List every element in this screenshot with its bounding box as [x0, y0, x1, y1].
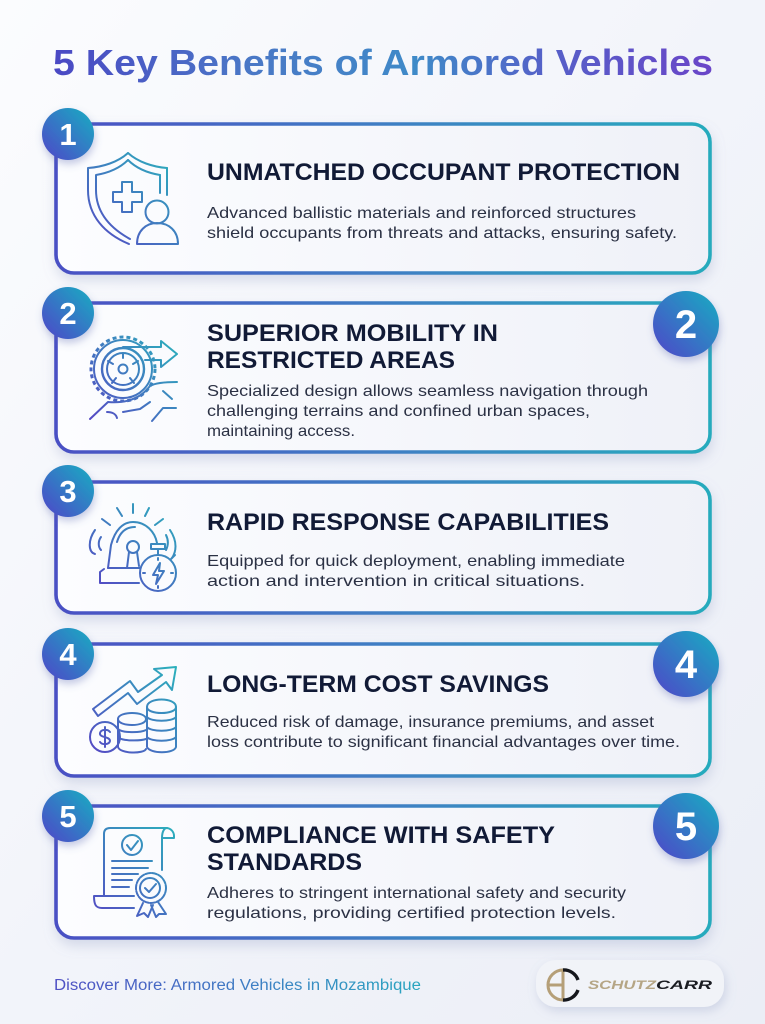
heading: RESTRICTED AREAS	[207, 347, 455, 374]
logo wordmark: CARR	[656, 980, 713, 992]
heading: COMPLIANCE WITH SAFETY	[207, 822, 555, 849]
number badge right	[653, 291, 719, 357]
heading: RAPID RESPONSE CAPABILITIES	[207, 509, 609, 536]
description: maintaining access.	[207, 423, 355, 440]
panel: rapid response	[42, 465, 710, 613]
number badge	[42, 287, 94, 339]
description: Equipped for quick deployment, enabling immediate	[207, 553, 625, 570]
description: Adheres to stringent international safety and security	[207, 885, 626, 902]
number badge right	[653, 793, 719, 859]
logo pill	[536, 960, 724, 1007]
footer link: Discover More: Armored Vehicles in Mozambique	[54, 977, 421, 994]
number badge right: 2	[675, 303, 697, 347]
heading: LONG-TERM COST SAVINGS	[207, 671, 549, 698]
description: Advanced ballistic materials and reinforced structures	[207, 205, 636, 222]
panel: unmatched occupant protection	[42, 108, 710, 273]
logo wordmark: SCHUTZ	[588, 980, 657, 992]
number badge: 1	[59, 117, 77, 152]
title: 5 Key Benefits of Armored Vehicles	[53, 42, 713, 83]
number badge right: 4	[675, 643, 698, 687]
number badge	[42, 465, 94, 517]
description: challenging terrains and confined urban spaces,	[207, 403, 590, 420]
number badge	[42, 628, 94, 680]
number badge: 2	[59, 296, 77, 331]
icon: logo mark	[548, 970, 578, 1000]
number badge	[42, 108, 94, 160]
description: Specialized design allows seamless navigation through	[207, 383, 648, 400]
icon: certificate with ribbon	[94, 828, 174, 917]
number badge	[42, 790, 94, 842]
number badge: 3	[59, 474, 77, 509]
icon: shield with cross and person	[88, 153, 178, 244]
heading: STANDARDS	[207, 849, 362, 876]
number badge right: 5	[675, 805, 697, 849]
icon: siren with stopwatch	[90, 504, 176, 591]
panel: long-term cost savings	[42, 628, 719, 776]
description: Reduced risk of damage, insurance premiums, and asset	[207, 714, 655, 731]
number badge right	[653, 631, 719, 697]
description: regulations, providing certified protection levels.	[207, 905, 616, 922]
panel: superior mobility	[42, 287, 719, 452]
heading: UNMATCHED OCCUPANT PROTECTION	[207, 159, 680, 186]
icon: rising arrow with coins	[90, 667, 176, 753]
icon: tire with arrow on terrain	[90, 337, 177, 421]
description: loss contribute to significant financial advantages over time.	[207, 734, 680, 751]
panel: compliance	[42, 790, 719, 938]
description: action and intervention in critical situations.	[207, 573, 585, 590]
number badge: 4	[59, 637, 77, 672]
description: shield occupants from threats and attacks, ensuring safety.	[207, 225, 677, 242]
heading: SUPERIOR MOBILITY IN	[207, 320, 498, 347]
number badge: 5	[59, 799, 77, 834]
